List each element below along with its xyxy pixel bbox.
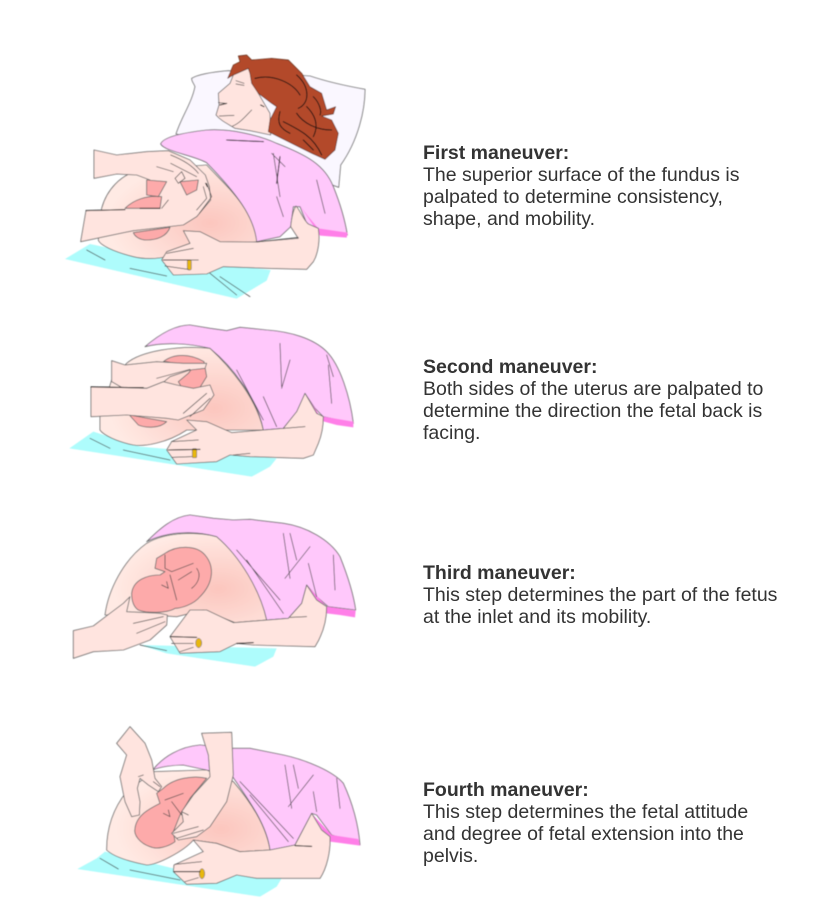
- fetus: [135, 777, 207, 848]
- patient hand and sheet lines: [140, 617, 307, 652]
- ring: [187, 260, 191, 270]
- sheet: [65, 244, 271, 299]
- text: fourth maneuver: This step determines the fetal attitude: [423, 801, 748, 823]
- text: first maneuver: [423, 142, 740, 230]
- text: first maneuver: First maneuver:: [423, 142, 569, 164]
- pillow: [176, 71, 365, 187]
- examiner lower hand: [91, 382, 214, 420]
- fetus: [132, 547, 211, 612]
- text: second maneuver: facing.: [423, 422, 480, 444]
- face lines: [218, 81, 252, 126]
- patient arm: [173, 813, 330, 884]
- gown hem: [307, 585, 356, 617]
- ring: [192, 449, 197, 458]
- fetus lines: [163, 793, 183, 817]
- illustration: first maneuver: [65, 55, 365, 299]
- gown hem: [305, 393, 353, 427]
- patient arm: [167, 393, 323, 464]
- belly: [107, 770, 270, 865]
- text: second maneuver: Both sides of the uterus are palpated to: [423, 378, 763, 400]
- text: second maneuver: determine the direction the fetal back is: [423, 400, 762, 422]
- fetus lines: [162, 555, 199, 600]
- patient hand and sheet lines: [87, 153, 325, 297]
- belly: [98, 165, 257, 259]
- text: fourth maneuver: and degree of fetal extension into the: [423, 823, 744, 845]
- sheet: [69, 432, 277, 477]
- text: fourth maneuver: [423, 779, 748, 867]
- gown hem: [300, 206, 348, 238]
- text: first maneuver: The superior surface of the fundus is: [423, 164, 740, 186]
- face and neck: [216, 68, 271, 135]
- hand lines: [157, 369, 210, 417]
- hair strands: [255, 75, 332, 155]
- sheet: [77, 852, 282, 897]
- text: fourth maneuver: Fourth maneuver:: [423, 779, 589, 801]
- gown: [161, 130, 347, 242]
- patient hand and sheet lines: [90, 427, 305, 460]
- text: third maneuver: [423, 562, 777, 628]
- patient arm: [170, 585, 327, 653]
- text: third maneuver: Third maneuver:: [423, 562, 576, 584]
- gown hem: [312, 813, 360, 846]
- examiner upper hand: [112, 361, 207, 388]
- fetus: [125, 180, 198, 240]
- text: third maneuver: This step determines the part of the fetus: [423, 584, 777, 606]
- text: second maneuver: [423, 356, 763, 444]
- text: first maneuver: shape, and mobility.: [423, 208, 595, 230]
- text: first maneuver: palpated to determine consistency,: [423, 186, 723, 208]
- hand lines: [157, 155, 212, 213]
- belly: [105, 533, 267, 623]
- text: third maneuver: at the inlet and its mobility.: [423, 606, 651, 628]
- illustration: third maneuver: [73, 515, 356, 667]
- examiner hand: [73, 597, 167, 658]
- fetus: [129, 355, 207, 427]
- belly: [100, 347, 263, 445]
- gown: [147, 515, 356, 620]
- examiner left hand: [117, 727, 162, 817]
- illustration: fourth maneuver: [77, 727, 360, 897]
- ring: [199, 869, 205, 879]
- examiner hand lines: [133, 617, 165, 633]
- hand detail lines: [138, 775, 203, 838]
- text: fourth maneuver: pelvis.: [423, 845, 478, 867]
- text: second maneuver: Second maneuver:: [423, 356, 597, 378]
- illustration: second maneuver: [69, 325, 353, 477]
- patient arm: [162, 206, 319, 275]
- examiner hands skin: [81, 150, 211, 242]
- gown lines: [240, 765, 340, 842]
- sheet: [140, 645, 277, 667]
- hair: [228, 55, 338, 159]
- gown: [153, 745, 360, 850]
- ring: [196, 638, 202, 648]
- patient hand and sheet lines: [100, 858, 202, 882]
- gown lines: [237, 533, 335, 613]
- examiner right hand: [172, 732, 233, 840]
- gown lines: [237, 343, 333, 427]
- gown: [145, 325, 353, 430]
- examiner hands outline: [81, 150, 211, 242]
